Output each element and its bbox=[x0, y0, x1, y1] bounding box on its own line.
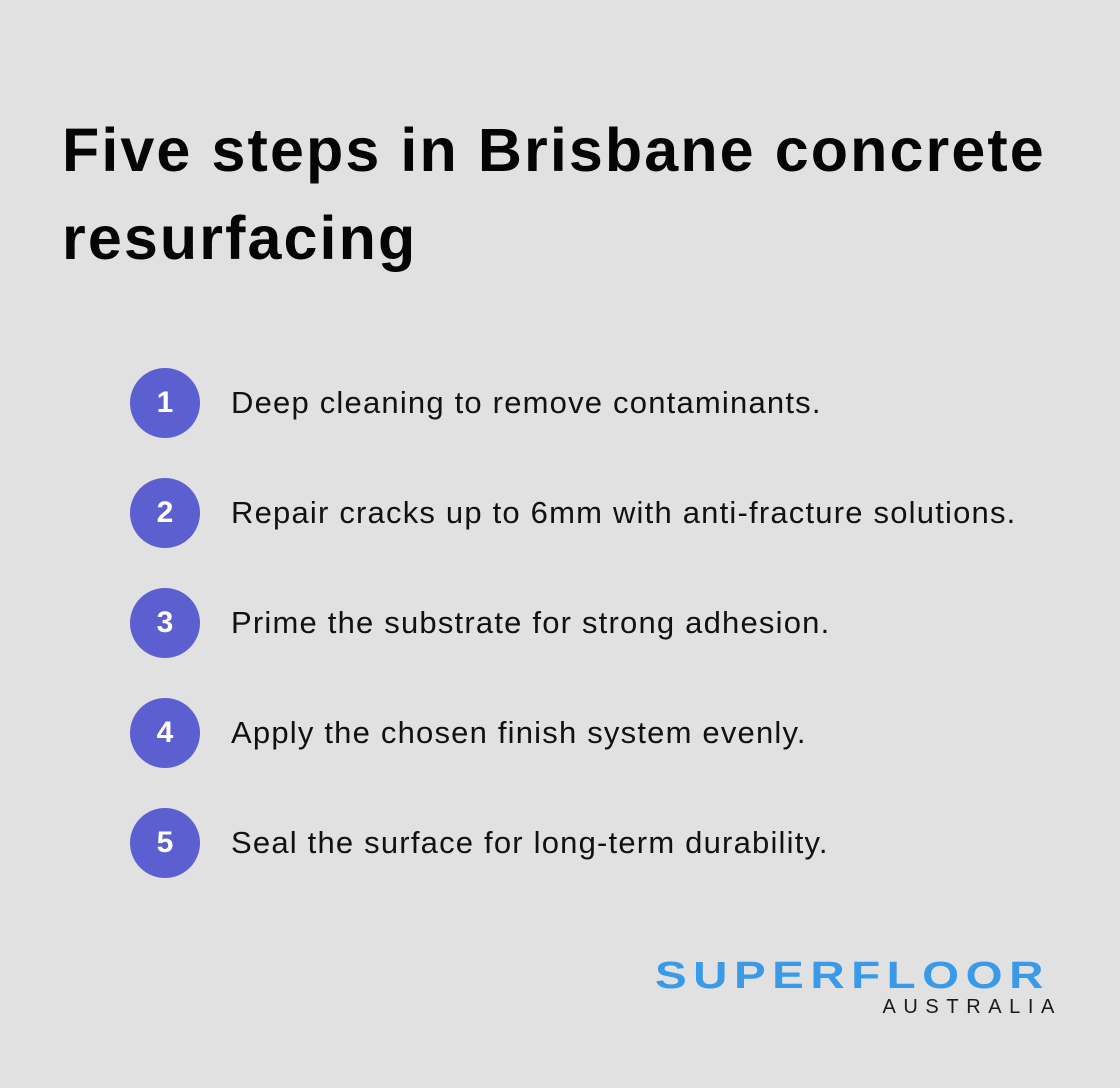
title: resurfacing bbox=[62, 204, 417, 272]
step 2: Repair cracks up to 6mm with anti-fracture solutions. bbox=[231, 495, 1016, 530]
step 5: Seal the surface for long-term durability. bbox=[231, 825, 829, 860]
step 2 bbox=[130, 478, 1016, 548]
step 1 bbox=[130, 368, 822, 438]
step 3: 3 bbox=[157, 606, 173, 639]
step 4: Apply the chosen finish system evenly. bbox=[231, 715, 807, 750]
title: Five steps in Brisbane concrete bbox=[62, 116, 1046, 184]
logo bbox=[655, 955, 1062, 1018]
step 5: 5 bbox=[157, 826, 173, 859]
step 1: 1 bbox=[157, 386, 173, 419]
step 4: 4 bbox=[157, 716, 173, 749]
step 1: Deep cleaning to remove contaminants. bbox=[231, 385, 822, 420]
step 5 bbox=[130, 808, 829, 878]
step 4 bbox=[130, 698, 807, 768]
title bbox=[62, 116, 1046, 272]
step 3 bbox=[130, 588, 830, 658]
step 2: 2 bbox=[157, 496, 173, 529]
step 3: Prime the substrate for strong adhesion. bbox=[231, 605, 830, 640]
logo: SUPERFLOOR bbox=[655, 955, 1050, 997]
logo: AUSTRALIA bbox=[882, 996, 1062, 1018]
